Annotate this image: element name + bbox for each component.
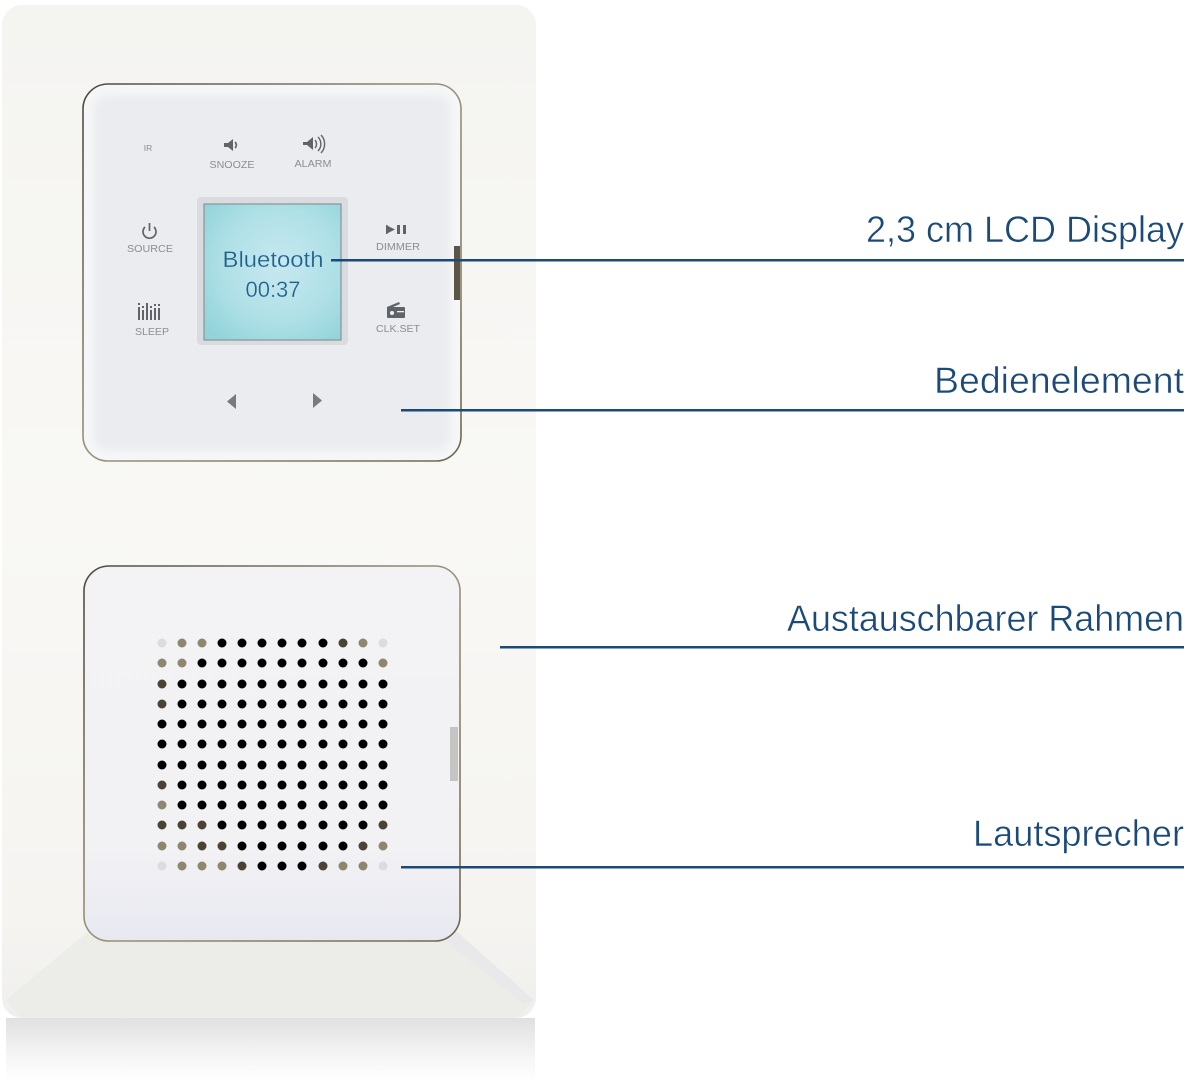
wall plate frame: [2, 5, 536, 1018]
side slot: [454, 246, 460, 300]
callout: Bedienelement: Bedienelement: [934, 360, 1185, 401]
button: dimmer: DIMMER: [376, 242, 420, 253]
callout: Lautsprecher: Lautsprecher: [973, 813, 1184, 854]
button: snooze: SNOOZE: [210, 160, 255, 171]
button: IR: IR: [144, 143, 152, 153]
button: sleep: SLEEP: [135, 327, 169, 338]
LCD screen: [204, 204, 341, 340]
button: previous: [227, 394, 236, 409]
side tab: [450, 727, 458, 781]
button: dimmer: [376, 225, 420, 253]
button: sleep: [135, 303, 169, 338]
button: clock set: [376, 302, 420, 335]
wall plate reflection: [6, 1018, 535, 1080]
LCD text: time: 00:37: [246, 277, 300, 302]
button: next: [313, 393, 322, 408]
LCD text: Bluetooth: Bluetooth: [222, 247, 324, 272]
control unit: [83, 84, 461, 461]
LCD bezel: [197, 197, 348, 345]
button: alarm: ALARM: [294, 159, 332, 170]
callout: 2,3 cm LCD Display: 2,3 cm LCD Display: [866, 209, 1184, 250]
callout: Austauschbarer Rahmen: Austauschbarer Rahmen: [787, 598, 1184, 639]
button: clock set: CLK.SET: [376, 324, 420, 335]
button: source: SOURCE: [127, 244, 173, 255]
speaker grille: [158, 638, 388, 870]
speaker unit: [84, 566, 460, 941]
button: alarm: [294, 135, 332, 170]
button: snooze: [210, 139, 255, 171]
button: source: [127, 223, 173, 255]
